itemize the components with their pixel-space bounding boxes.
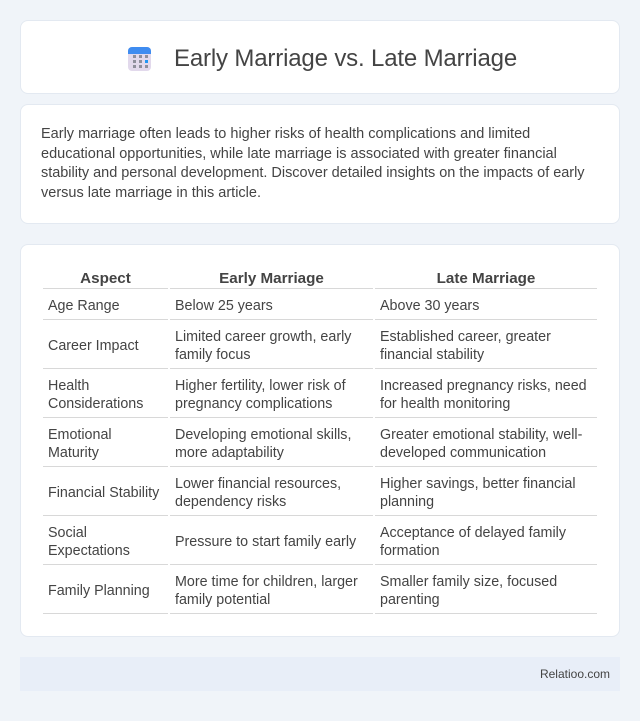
panel: intro	[20, 104, 620, 224]
row: career impact: Limited career growth, early	[175, 329, 351, 345]
row: family planning: Smaller family size, focused	[380, 574, 557, 590]
intro text	[41, 126, 585, 201]
row: health considerations	[48, 378, 587, 412]
row: social expectations: formation	[380, 543, 440, 559]
row: emotional maturity: Developing emotional skills,	[175, 427, 351, 443]
row: age range: Below 25 years	[175, 298, 273, 314]
intro text: educational opportunities, while late marriage is associated with greater financial	[41, 146, 557, 162]
row: social expectations: Expectations	[48, 543, 130, 559]
title: Early Marriage vs. Late Marriage	[174, 45, 517, 72]
intro text: versus late marriage in this article.	[41, 185, 261, 201]
footer brand text: Relatioo.com	[540, 667, 610, 681]
row: career impact: financial stability	[380, 347, 484, 363]
row: social expectations: Pressure to start family early	[175, 534, 356, 550]
row: financial stability: Higher savings, better financial	[380, 476, 576, 492]
row: family planning	[48, 574, 557, 608]
table header: Late Marriage	[437, 270, 535, 287]
row: health considerations: for health monitoring	[380, 396, 510, 412]
row: health considerations: pregnancy complications	[175, 396, 332, 412]
row: financial stability: dependency risks	[175, 494, 286, 510]
row: emotional maturity	[48, 427, 582, 461]
icon: calendar	[128, 47, 151, 71]
panel: comparison table	[20, 244, 620, 637]
table header: Early Marriage	[219, 270, 324, 287]
row: financial stability: planning	[380, 494, 434, 510]
row: career impact: family focus	[175, 347, 250, 363]
row: emotional maturity: developed communication	[380, 445, 546, 461]
row: family planning: family potential	[175, 592, 270, 608]
row: health considerations: Considerations	[48, 396, 143, 412]
row: financial stability: Financial Stability	[48, 485, 159, 501]
table header: Aspect	[80, 270, 131, 287]
row: family planning: Family Planning	[48, 583, 150, 599]
row: social expectations: Social	[48, 525, 87, 541]
footer bar	[20, 657, 620, 691]
row: age range: Age Range	[48, 298, 120, 314]
row: health considerations: Higher fertility, lower risk of	[175, 378, 346, 394]
row: social expectations	[48, 525, 566, 559]
row: career impact	[48, 329, 551, 363]
row: financial stability	[48, 476, 576, 510]
panel: title header	[20, 20, 620, 94]
row: emotional maturity: more adaptability	[175, 445, 284, 461]
row: age range	[48, 298, 479, 314]
row: health considerations: Health	[48, 378, 89, 394]
row: family planning: More time for children, larger	[175, 574, 358, 590]
row: career impact: Established career, greater	[380, 329, 551, 345]
table header	[80, 270, 535, 287]
intro text: stability and personal development. Discover detailed insights on the impacts of early	[41, 165, 585, 181]
comparison table	[43, 270, 597, 614]
row: age range: Above 30 years	[380, 298, 479, 314]
row: career impact: Career Impact	[48, 338, 139, 354]
row: emotional maturity: Emotional	[48, 427, 112, 443]
row: emotional maturity: Maturity	[48, 445, 99, 461]
row: financial stability: Lower financial resources,	[175, 476, 341, 492]
intro text: Early marriage often leads to higher risks of health complications and limited	[41, 126, 530, 142]
row: family planning: parenting	[380, 592, 440, 608]
row: social expectations: Acceptance of delayed family	[380, 525, 566, 541]
row: health considerations: Increased pregnancy risks, need	[380, 378, 587, 394]
row: emotional maturity: Greater emotional stability, well-	[380, 427, 582, 443]
